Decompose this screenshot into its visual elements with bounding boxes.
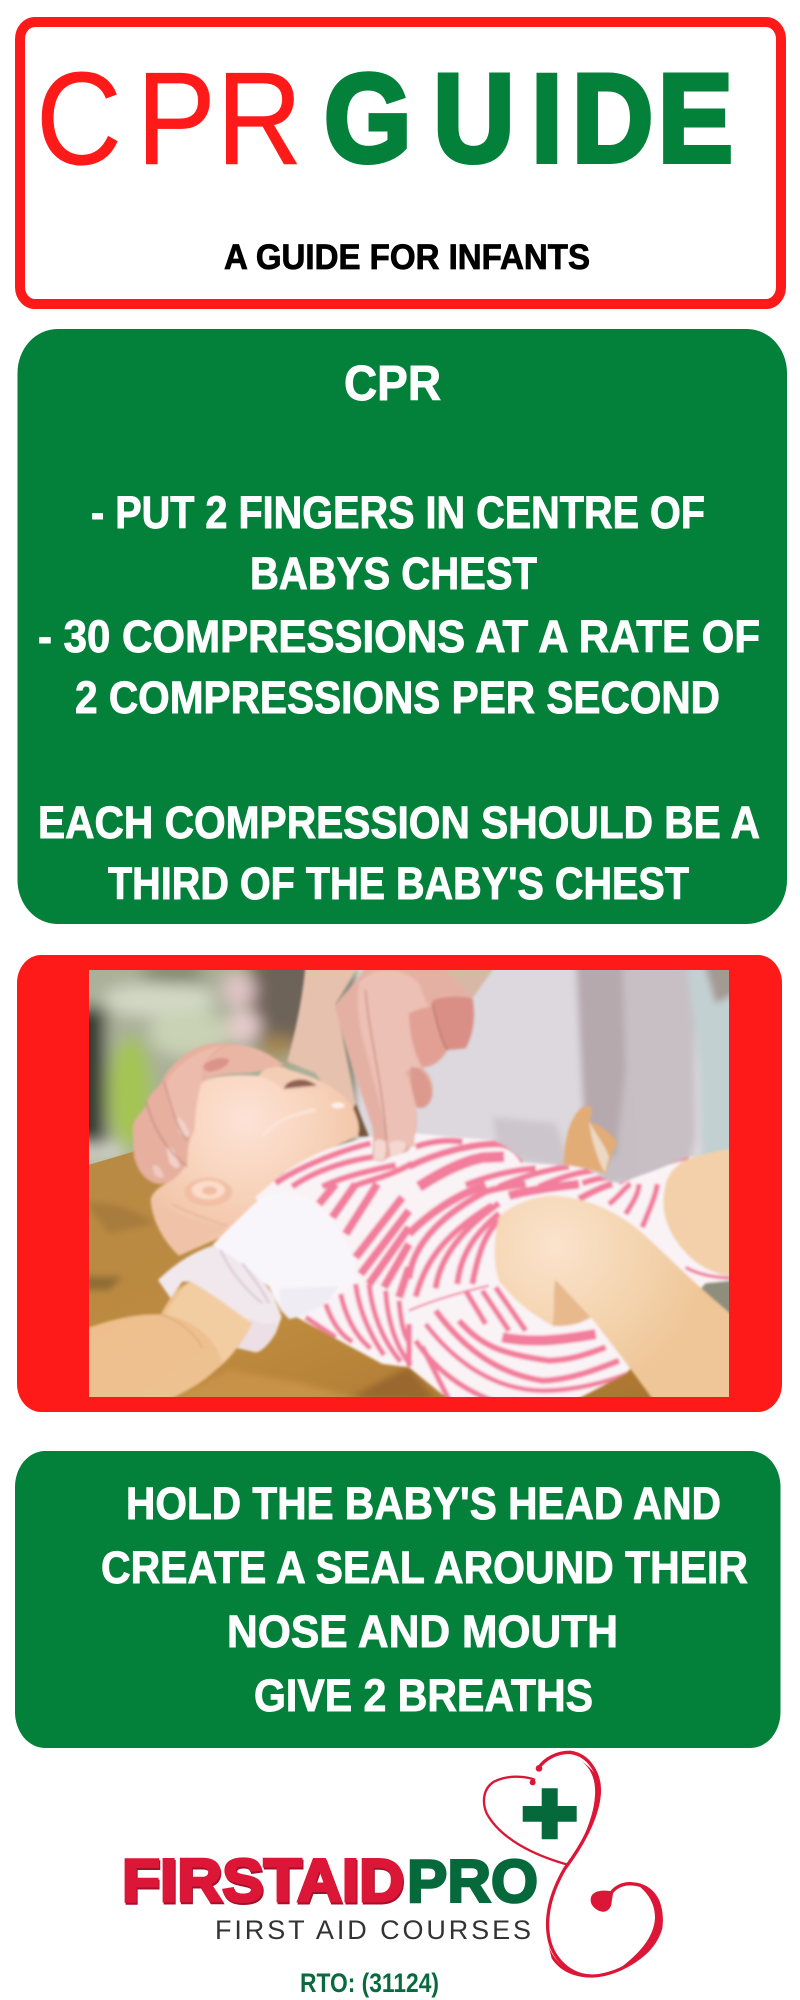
lower fan stripes (296, 1284, 411, 1365)
step: compression depth (38, 797, 760, 909)
breath instructions (101, 1478, 748, 1721)
subtitle: A GUIDE FOR INFANTS (224, 238, 590, 277)
breath instructions: GIVE 2 BREATHS (254, 1670, 593, 1721)
panel: rescue breaths (15, 1451, 780, 1748)
panel: title header (20, 22, 781, 304)
left flank stripes (319, 1184, 409, 1297)
white shirt (351, 970, 729, 1184)
icon: green cross (523, 1788, 577, 1839)
manikin ear (184, 1178, 232, 1206)
lower arm (89, 1282, 244, 1397)
panel heading: CPR (344, 357, 441, 411)
upper belly stripes (409, 1185, 486, 1234)
chest stripes (276, 1143, 412, 1187)
step: finger placement: BABYS CHEST (250, 548, 537, 599)
stethoscope chest piece (591, 1891, 613, 1912)
breath instructions: NOSE AND MOUTH (227, 1606, 618, 1657)
step: compression rate: - 30 COMPRESSIONS AT A RATE OF (38, 611, 760, 662)
tagline: FIRST AID COURSES (215, 1915, 531, 1945)
wood table (89, 1152, 653, 1397)
step: finger placement (91, 487, 705, 599)
wordmark: FIRSTAID PRO (122, 1847, 538, 1915)
far leg (662, 1148, 729, 1278)
title: CPR GUIDE: CPR (36, 44, 302, 192)
panel background (18, 329, 787, 924)
logo: First Aid Pro (122, 1752, 663, 1998)
title: CPR GUIDE (36, 44, 733, 192)
lower belly arcs (409, 1286, 489, 1311)
header frame (20, 22, 781, 304)
panel background (15, 1451, 780, 1748)
wordmark: FIRSTAID PRO: PRO (407, 1848, 538, 1915)
blurred background plants (89, 970, 320, 1165)
breath instructions: CREATE A SEAL AROUND THEIR (101, 1542, 748, 1593)
icon: stethoscope heart (484, 1752, 663, 1977)
RTO number: RTO: (31124) (300, 1968, 439, 1998)
holding hand (131, 1042, 235, 1186)
sleeve (211, 1200, 296, 1320)
ruffle (158, 1246, 282, 1352)
breath instructions: HOLD THE BABY'S HEAD AND (126, 1478, 721, 1529)
manikin head (151, 1067, 359, 1256)
step: compression rate: 2 COMPRESSIONS PER SECOND (75, 672, 720, 723)
title: CPR GUIDE: GUIDE (324, 49, 733, 189)
step: compression rate (38, 611, 760, 723)
pressing hand (334, 970, 472, 1162)
panel: CPR compression steps (18, 329, 787, 924)
step: compression depth: THIRD OF THE BABY'S CHEST (108, 858, 689, 909)
panel: photo of infant CPR (17, 950, 782, 1412)
photo frame (17, 955, 782, 1412)
carer forearm (286, 970, 358, 1108)
wordmark: FIRSTAID PRO: FIRSTAID (122, 1847, 404, 1914)
photo: fingers compressing infant manikin chest (89, 970, 729, 1397)
step: finger placement: - PUT 2 FINGERS IN CENTRE OF (91, 487, 705, 538)
doll hand (562, 1375, 563, 1378)
near thigh and knee (495, 1196, 742, 1403)
striped romper (249, 1127, 749, 1403)
